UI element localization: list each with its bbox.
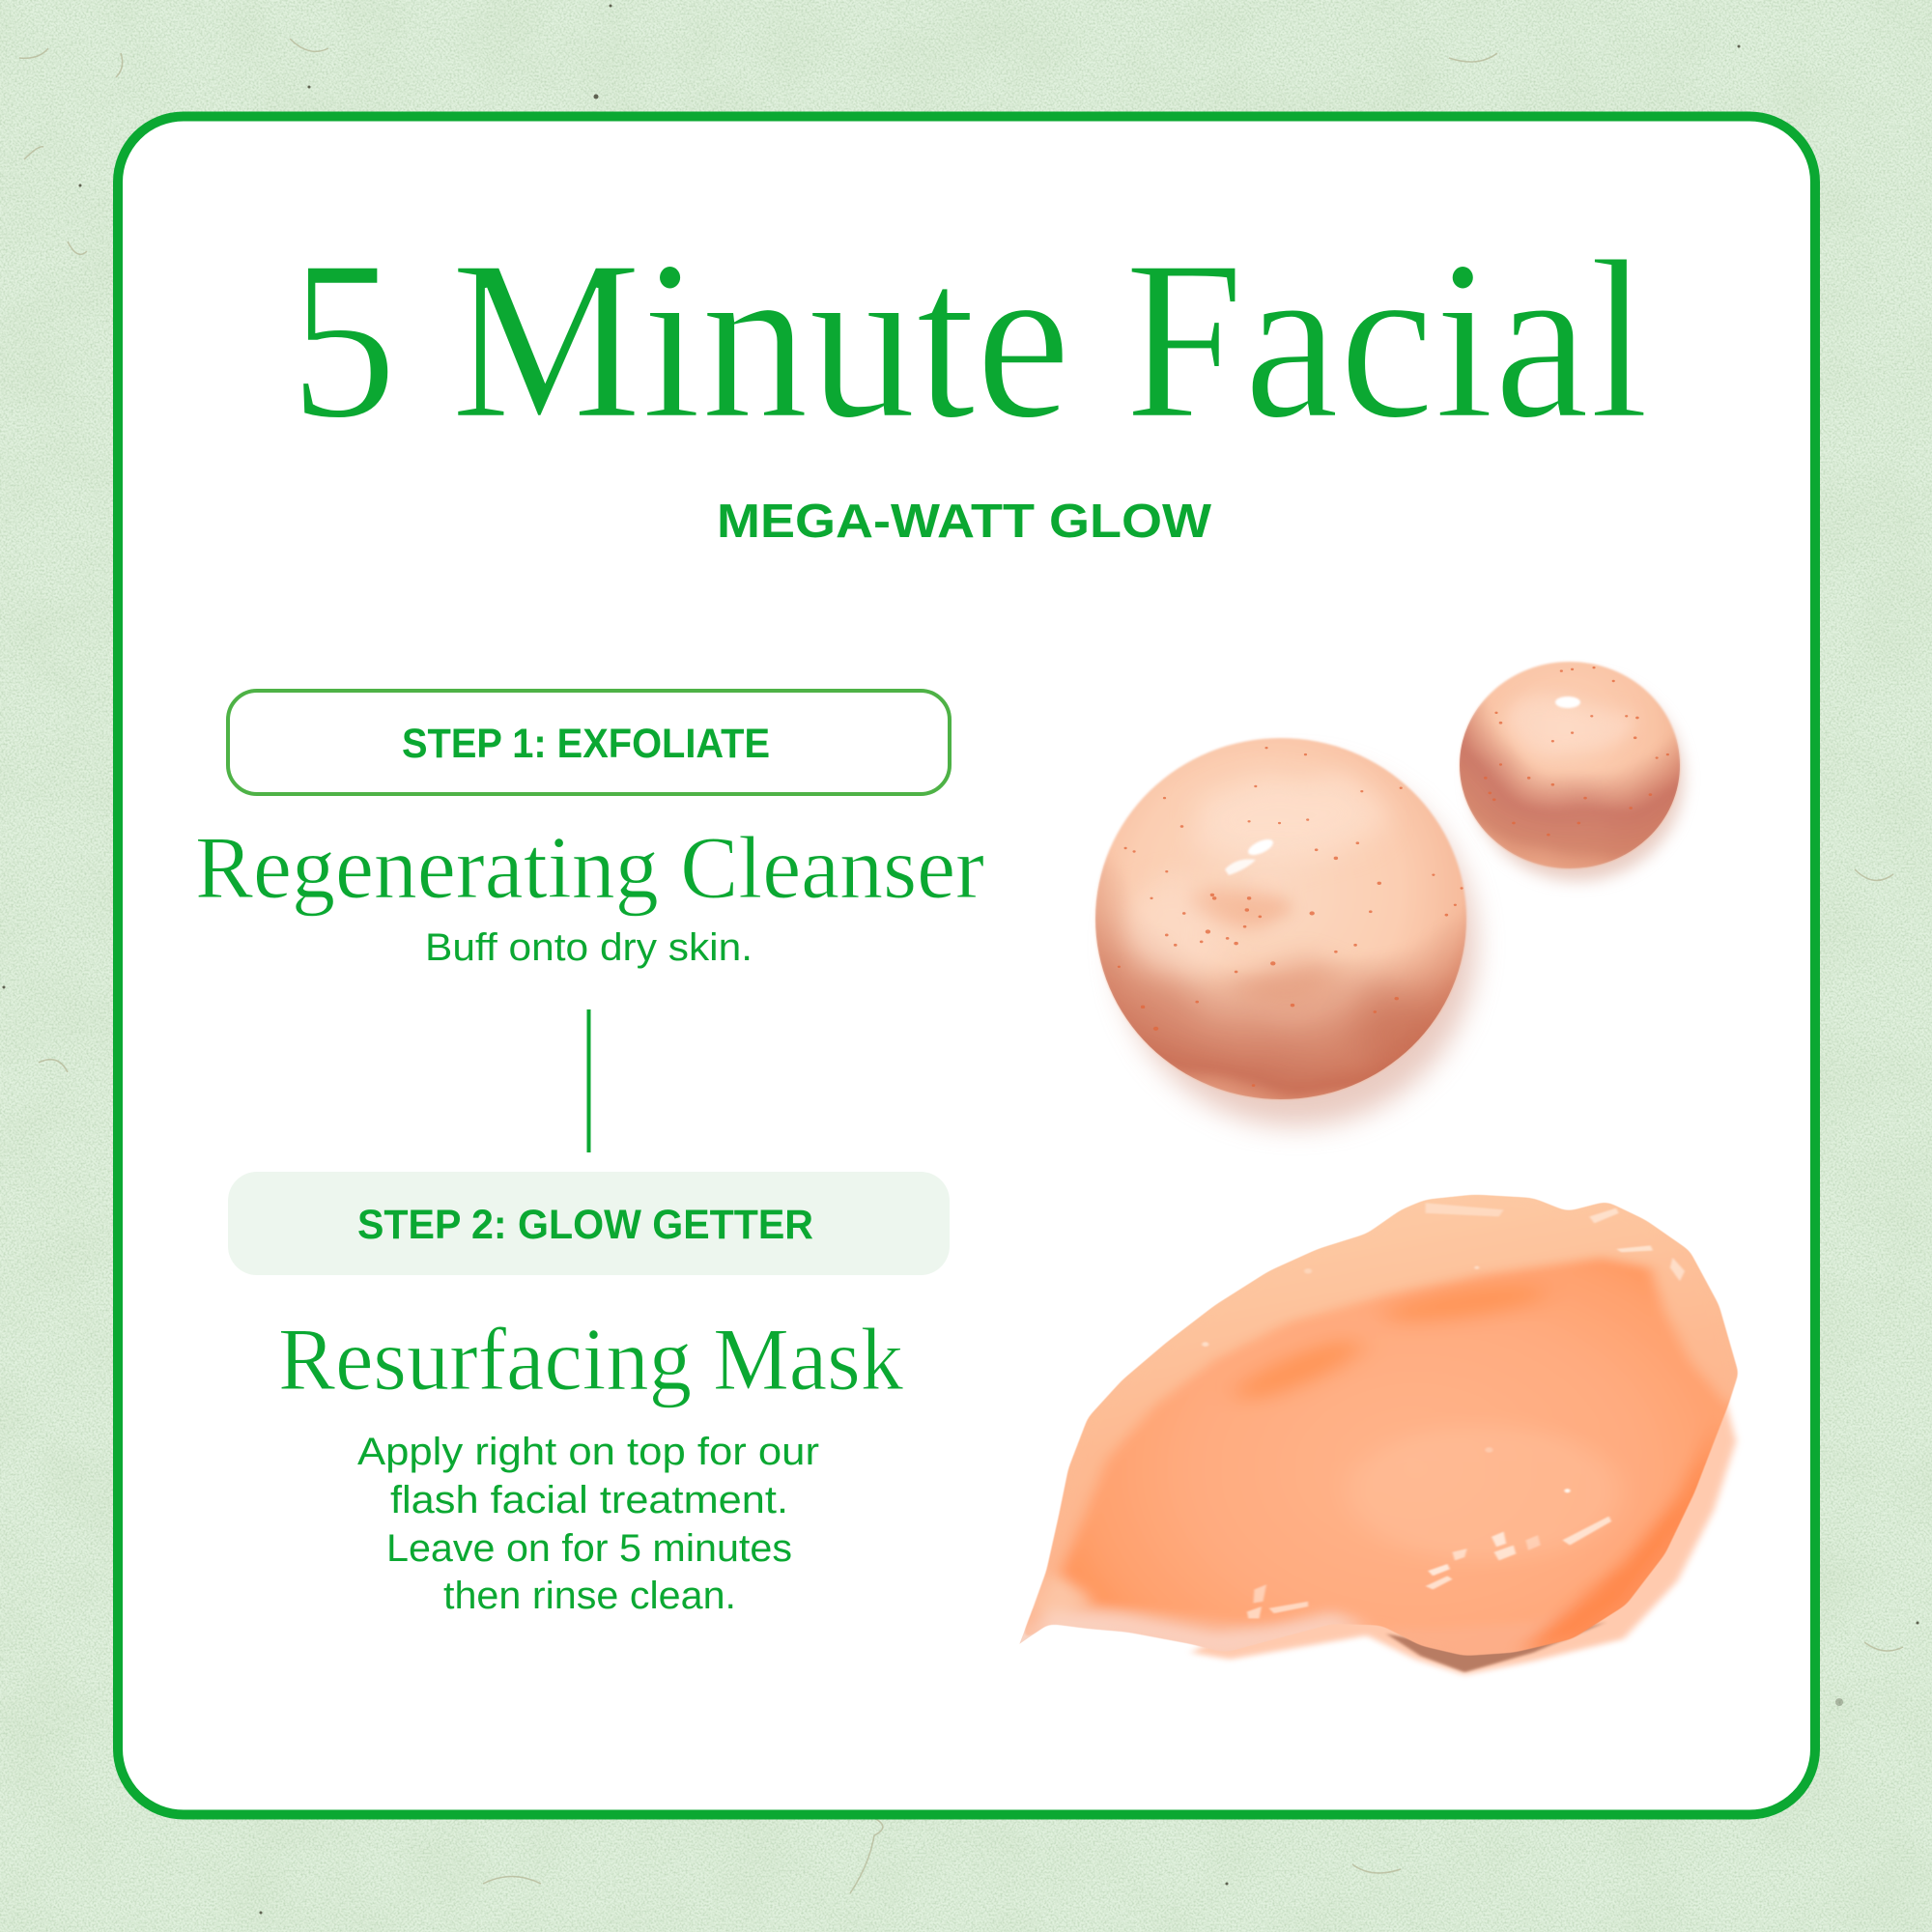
exfoliant speckles [1118,747,1463,1087]
connector line between steps [587,1009,591,1152]
exfoliant speckles [1484,667,1669,837]
main card [118,116,1815,1814]
instructions paragraph [357,1431,819,1617]
step 2 label pill: STEP 2: GLOW GETTER [357,1202,813,1248]
step 2 column [228,1172,950,1617]
subtitle: MEGA-WATT GLOW [717,496,1212,548]
instruction: buff onto dry skin: Buff onto dry skin. [425,926,753,969]
glossy highlight [1555,696,1580,708]
step 1 label pill: STEP 1: EXFOLIATE [402,721,770,767]
large droplet [1063,715,1488,1126]
central pool [1059,1258,1729,1629]
cleanser swatch: two exfoliating droplets [1063,647,1700,1126]
step 2 label pill [228,1172,950,1275]
instructions paragraph: Leave on for 5 minutes [386,1527,792,1570]
tail tip [1019,1608,1049,1644]
glossy highlight [1225,837,1275,875]
mask swatch: orange gel smear [1019,1194,1739,1675]
product name: resurfacing mask: Resurfacing Mask [278,1310,903,1408]
small droplet [1459,661,1691,889]
product name: regenerating cleanser: Regenerating Cleanser [195,818,984,917]
title: 5 Minute Facial [290,214,1649,467]
glossy highlights [1202,1203,1685,1618]
step 1 label pill [228,691,950,794]
step 1 column [195,691,984,969]
gel body [1019,1194,1739,1656]
instructions paragraph: Apply right on top for our [357,1431,819,1473]
cast shadow [1191,1394,1736,1675]
instructions paragraph: flash facial treatment. [390,1479,788,1521]
instructions paragraph: then rinse clean. [443,1575,736,1617]
